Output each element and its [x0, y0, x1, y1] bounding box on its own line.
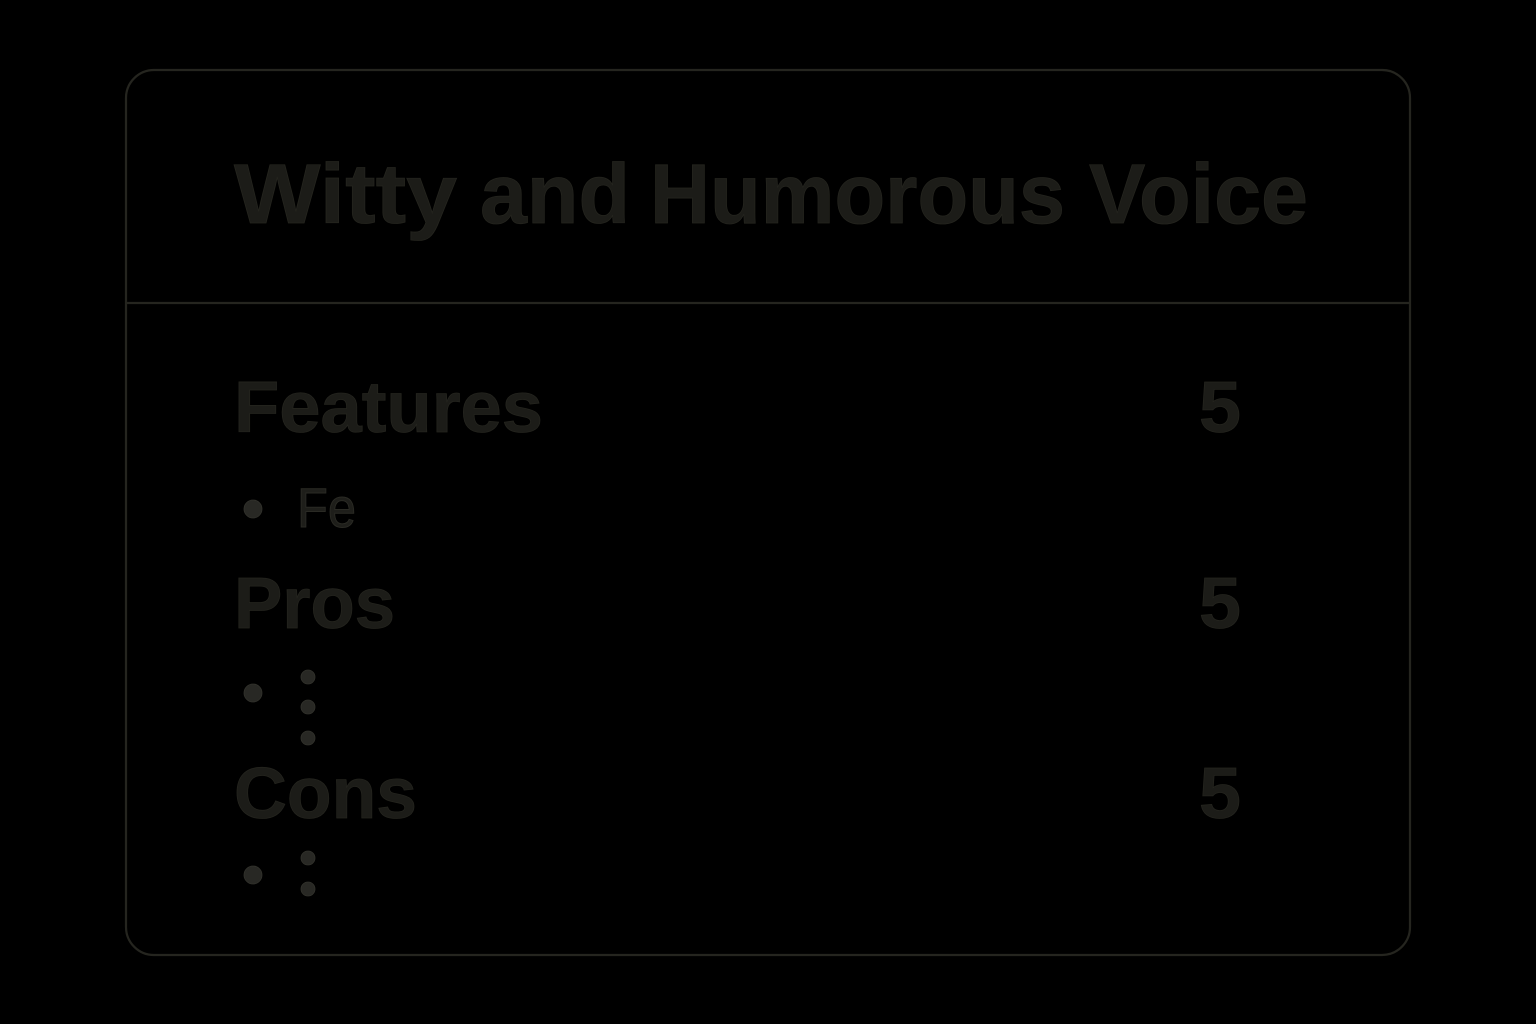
heading: title: [234, 147, 1308, 241]
panel: card: [126, 70, 1410, 955]
heading: title: Witty: [234, 147, 457, 241]
pros bullet: [244, 684, 262, 702]
cons heading: Cons: [234, 754, 417, 834]
features bullet: [244, 500, 262, 518]
cons bullet: [244, 866, 262, 884]
heading: title: Voice: [1089, 147, 1308, 241]
heading: title: and: [480, 147, 630, 241]
section: features: [234, 368, 1241, 539]
pros heading: Pros: [234, 564, 395, 644]
section: cons: [234, 754, 1241, 896]
cons score: 5: [1199, 754, 1241, 834]
features score: 5: [1199, 368, 1241, 448]
heading: title: Humorous: [650, 147, 1065, 241]
features item text: Fe: [297, 476, 356, 539]
features heading: Features: [234, 368, 543, 448]
pros item dots: [301, 670, 315, 745]
pros score: 5: [1199, 564, 1241, 644]
cons item dots: [301, 851, 315, 896]
section: pros: [234, 564, 1241, 745]
